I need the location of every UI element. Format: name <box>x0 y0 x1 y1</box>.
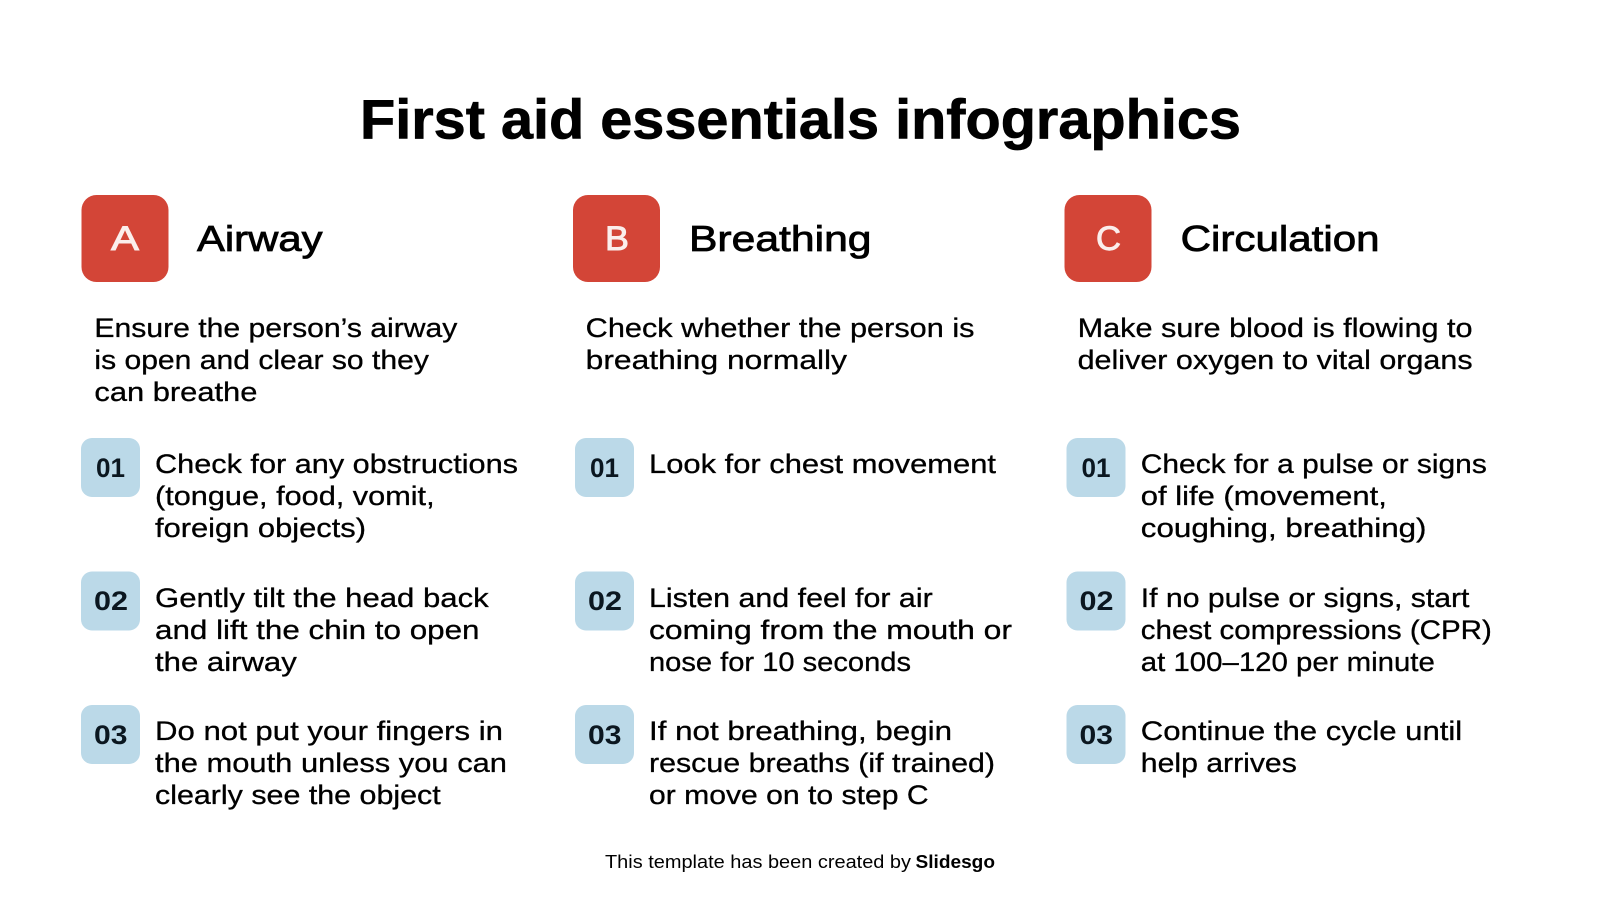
Circulation step 01: 01 <box>1082 453 1110 483</box>
Breathing step 03: or move on to step C <box>649 780 929 810</box>
Circulation step 02 <box>1066 572 1492 677</box>
panel: Breathing column <box>573 195 1012 810</box>
Circulation description: deliver oxygen to vital organs <box>1078 345 1473 375</box>
Airway letter badge <box>82 195 168 282</box>
Airway description <box>94 313 458 407</box>
Circulation letter badge <box>1064 195 1152 282</box>
title: First aid essentials infographics <box>360 88 1241 150</box>
Breathing step 01: Look for chest movement <box>649 449 997 479</box>
Airway heading: Airway <box>197 218 322 259</box>
Circulation step 02: at 100–120 per minute <box>1141 647 1435 677</box>
Circulation step 01: coughing, breathing) <box>1141 513 1426 543</box>
Circulation step 01: of life (movement, <box>1141 481 1387 511</box>
panel: Airway column <box>81 195 518 810</box>
Breathing step 03: rescue breaths (if trained) <box>649 748 995 778</box>
Circulation description: Make sure blood is flowing to <box>1078 313 1473 343</box>
Circulation step 02: If no pulse or signs, start <box>1141 583 1470 613</box>
footer credit: Slidesgo <box>916 851 995 872</box>
Breathing description <box>586 313 974 375</box>
Airway step 03: the mouth unless you can <box>155 748 507 778</box>
Circulation step 03: Continue the cycle until <box>1141 716 1462 746</box>
Circulation heading: Circulation <box>1181 218 1380 259</box>
Airway step 03 <box>81 705 507 810</box>
panel: Circulation column <box>1064 195 1492 778</box>
Airway step 01: 01 <box>96 453 125 483</box>
Circulation step 03: 03 <box>1080 720 1113 750</box>
Breathing letter badge: B <box>605 220 629 258</box>
Airway step 02: Gently tilt the head back <box>155 583 489 613</box>
Circulation description <box>1078 313 1473 375</box>
Circulation step 02: 02 <box>1080 586 1114 616</box>
Airway description: is open and clear so they <box>94 345 429 375</box>
Circulation step 03 <box>1066 705 1462 778</box>
Breathing step 03: 03 <box>588 720 622 750</box>
Breathing description: breathing normally <box>586 345 848 375</box>
Airway step 02: 02 <box>94 586 128 616</box>
Airway step 01: Check for any obstructions <box>155 449 518 479</box>
Breathing step 03: If not breathing, begin <box>649 716 952 746</box>
Breathing step 02: Listen and feel for air <box>649 583 933 613</box>
footer credit: This template has been created by <box>605 851 912 872</box>
Breathing step 01: 01 <box>590 453 619 483</box>
Breathing heading: Breathing <box>689 218 872 259</box>
Breathing step 02: nose for 10 seconds <box>649 647 911 677</box>
Airway letter badge: A <box>111 220 139 258</box>
Circulation step 01: Check for a pulse or signs <box>1141 449 1487 479</box>
Breathing step 02: 02 <box>588 586 622 616</box>
Airway step 02: and lift the chin to open <box>155 615 480 645</box>
Airway step 03: clearly see the object <box>155 780 441 810</box>
Airway step 03: Do not put your fingers in <box>155 716 503 746</box>
Breathing letter badge <box>573 195 660 282</box>
Circulation letter badge: C <box>1096 220 1121 258</box>
Circulation step 01 <box>1066 438 1487 543</box>
Airway description: can breathe <box>94 377 257 407</box>
Breathing step 02: coming from the mouth or <box>649 615 1012 645</box>
Breathing step 02 <box>575 572 1012 677</box>
Airway step 03: 03 <box>94 720 128 750</box>
Airway description: Ensure the person’s airway <box>94 313 458 343</box>
Circulation step 02: chest compressions (CPR) <box>1141 615 1492 645</box>
Airway step 01: foreign objects) <box>155 513 366 543</box>
Breathing step 01 <box>575 438 997 497</box>
Breathing step 03 <box>575 705 995 810</box>
Airway step 02: the airway <box>155 647 297 677</box>
Airway step 01 <box>81 438 518 543</box>
Breathing description: Check whether the person is <box>586 313 974 343</box>
Circulation step 03: help arrives <box>1141 748 1297 778</box>
Airway step 02 <box>81 572 489 677</box>
Airway step 01: (tongue, food, vomit, <box>155 481 435 511</box>
